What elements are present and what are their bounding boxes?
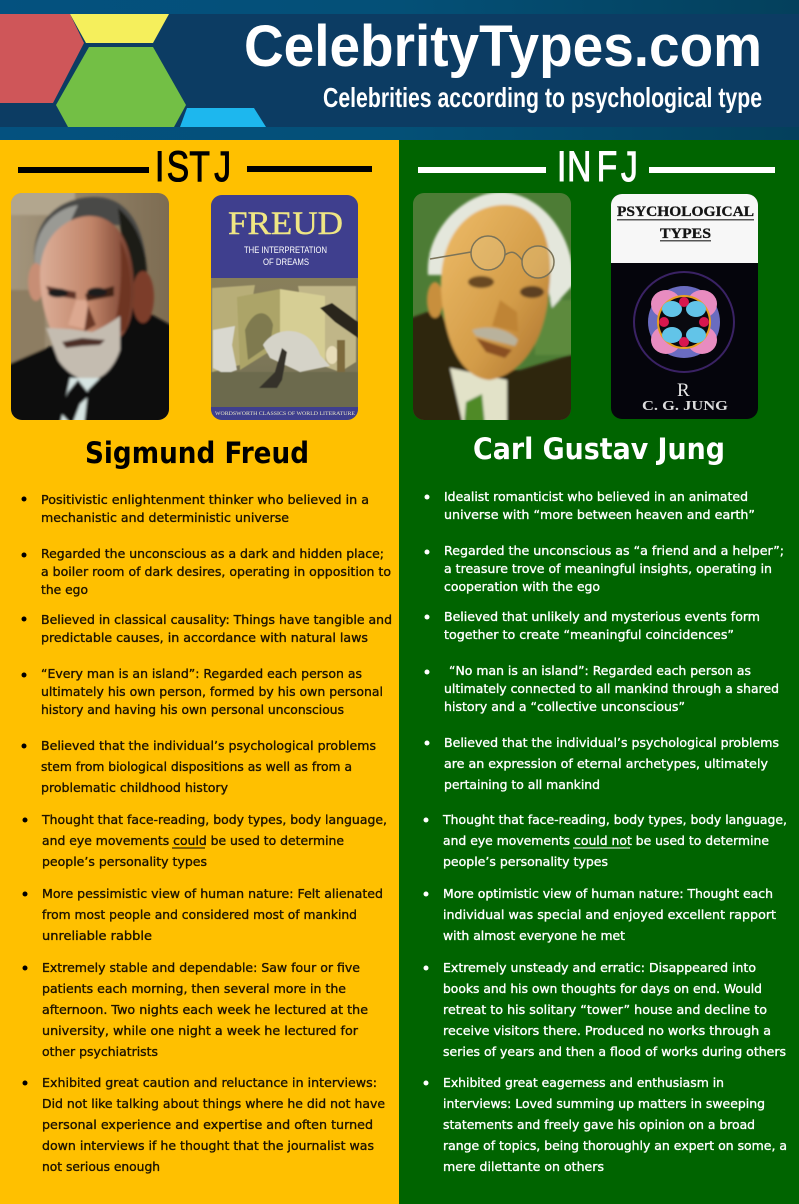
bullet: face-reading: Thought that face-reading, body types, body language,	[442, 812, 787, 827]
face	[441, 205, 550, 380]
mandala	[634, 272, 734, 372]
bullet: interviews: statements and freely gave his opinion on a broad	[443, 1117, 755, 1132]
bullet: coincidences: together to create “meaningful coincidences”	[444, 627, 734, 642]
bullet: idealist	[424, 489, 755, 522]
icon: yellow hexagon	[70, 14, 169, 43]
bullet: causality: predictable causes, in accordance with natural laws	[41, 630, 368, 645]
bullet: problems: pertaining to all mankind	[444, 777, 600, 792]
bullet: island: ultimately connected to all mankind through a shared	[444, 681, 779, 696]
bullet: unsteady: series of years and then a flood of works during others	[443, 1044, 786, 1059]
bullet: interviews: down interviews if he thought that the journalist was	[42, 1138, 374, 1153]
header banner	[0, 0, 799, 140]
bullet: stable: afternoon. Two nights each week he lectured at the	[42, 1002, 368, 1017]
bullet: unconscious: a treasure trove of meaningful insights, operating in	[444, 561, 772, 576]
bullet: interviews: not serious enough	[42, 1159, 160, 1174]
bullet: face-reading	[22, 812, 387, 869]
bullet: idealist: Idealist romanticist who believed in an animated	[444, 489, 748, 504]
heading: INFJ	[418, 143, 775, 191]
book subtitle: THE INTERPRETATION	[244, 245, 327, 255]
brow and eye shadow	[46, 286, 76, 299]
heading: ISTJ	[18, 143, 372, 191]
bullet: interviews: range of topics, being thoroughly an expert on some, a	[443, 1138, 787, 1153]
bullet: pessimistic: More pessimistic view of human nature: Felt alienated	[42, 886, 383, 901]
bullet: stable	[22, 960, 368, 1059]
ear	[132, 271, 154, 323]
bullet: island: “Every man is an island”: Regarded each person as	[41, 666, 362, 681]
bullet: unsteady: receive visitors there. Produced no works through a	[443, 1023, 771, 1038]
bullet: idealist: universe with “more between heaven and earth”	[444, 507, 755, 522]
jacket	[413, 310, 571, 420]
icon: blue hexagon	[180, 108, 266, 127]
bullet: face-reading: people’s personality types	[42, 854, 207, 869]
bullet: face-reading	[424, 812, 787, 869]
bullet: optimistic: More optimistic view of human nature: Thought each	[443, 886, 773, 901]
bullet: problems: are an expression of eternal archetypes, ultimately	[444, 756, 769, 771]
bullet: problems: problematic childhood history	[41, 780, 229, 795]
bullet: pessimistic: from most people and considered most of mankind	[42, 907, 357, 922]
book cover: Psychological Types	[611, 194, 758, 419]
bullet: island: history and having his own personal unconscious	[41, 702, 344, 717]
bullet: interviews: Exhibited great eagerness and enthusiasm in	[443, 1075, 724, 1090]
bullet: optimistic	[424, 886, 776, 943]
beard	[46, 316, 120, 380]
bullet: pessimistic: unreliable rabble	[42, 928, 152, 943]
cover painting	[211, 284, 358, 390]
book subtitle: OF DREAMS	[263, 257, 309, 267]
bullet: stable: university, while one night a week he lectured for	[42, 1023, 359, 1038]
bullet: problems: Believed that the individual’s psychological problems	[444, 735, 779, 750]
glasses	[430, 236, 554, 278]
name: Sigmund Freud: Sigmund Freud	[85, 436, 309, 470]
bullet: unconscious: Regarded the unconscious as a dark and hidden place;	[41, 546, 384, 561]
bullet: causality: Believed in classical causality: Things have tangible and	[41, 612, 392, 627]
bullet: problems	[22, 738, 376, 795]
bullet: island	[424, 663, 779, 714]
book author: C. G. JUNG	[642, 399, 728, 414]
portrait: Sigmund Freud	[11, 193, 169, 420]
heading: ISTJ: ISTJ	[155, 143, 231, 191]
tie	[464, 394, 485, 425]
bullet: face-reading: and eye movements could be used to determine	[42, 833, 344, 848]
book title: TYPES	[660, 226, 711, 242]
collar	[450, 368, 507, 425]
ear	[427, 282, 443, 318]
bullet: face-reading: and eye movements could not be used to determine	[443, 833, 769, 848]
panel: INFJ background	[399, 140, 799, 1204]
site title: CelebrityTypes.com	[244, 14, 762, 79]
book subtitle	[244, 246, 326, 265]
bullet: optimistic: individual was special and enjoyed excellent rapport	[443, 907, 776, 922]
bullet: face-reading: Thought that face-reading, body types, body language,	[41, 812, 387, 827]
bullet: stable: other psychiatrists	[42, 1044, 158, 1059]
bullet: interviews	[424, 1075, 787, 1174]
bullet: face-reading: people’s personality types	[443, 854, 608, 869]
bullet: interviews: interviews: Loved summing up matters in sweeping	[443, 1096, 765, 1111]
bullet: island: “No man is an island”: Regarded each person as	[449, 663, 751, 678]
bullet: unconscious: cooperation with the ego	[444, 579, 600, 594]
bullet: unconscious: a boiler room of dark desires, operating in opposition to	[41, 564, 391, 579]
bullet: interviews	[22, 1075, 385, 1174]
book cover: The Interpretation of Dreams	[211, 195, 358, 420]
bullet: unsteady: Extremely unsteady and erratic: Disappeared into	[443, 960, 756, 975]
text list: Jung traits	[424, 489, 787, 1174]
bullet: interviews: Exhibited great caution and reluctance in interviews:	[42, 1075, 377, 1090]
bullet: island	[22, 666, 383, 717]
bullet: problems	[424, 735, 779, 792]
bullet: unconscious	[424, 543, 784, 594]
bullet: problems: stem from biological dispositions as well as from a	[41, 759, 352, 774]
bullet: problems: Believed that the individual’s psychological problems	[41, 738, 376, 753]
bullet: island: ultimately his own person, formed by his own personal	[41, 684, 383, 699]
icon: red hexagon	[0, 14, 84, 103]
book series strip: WORDSWORTH CLASSICS OF WORLD LITERATURE	[215, 411, 356, 417]
collar	[60, 378, 100, 425]
bullet: unsteady: books and his own thoughts for days on end. Would	[443, 981, 762, 996]
book title: FREUD: FREUD	[228, 206, 343, 242]
book title	[617, 204, 754, 242]
bullet: coincidences: Believed that unlikely and mysterious events form	[444, 609, 760, 624]
bullet: pessimistic	[22, 886, 383, 943]
bullet: positivistic	[22, 492, 369, 525]
bullet: optimistic: with almost everyone he met	[443, 928, 625, 943]
bullet: interviews: Did not like talking about things where he did not have	[42, 1096, 385, 1111]
suit	[11, 308, 169, 420]
hair	[428, 192, 573, 308]
bullet: unconscious: Regarded the unconscious as “a friend and a helper”;	[444, 543, 784, 558]
bullet: interviews: mere dilettante on others	[443, 1159, 604, 1174]
publisher mark: R	[677, 380, 690, 401]
name: Carl Gustav Jung: Carl Gustav Jung	[473, 432, 725, 466]
panel: ISTJ background	[0, 140, 399, 1204]
icon: green hexagon	[56, 47, 186, 127]
book title: PSYCHOLOGICAL	[617, 204, 754, 220]
bullet: positivistic: mechanistic and deterministic universe	[41, 510, 289, 525]
bullet: stable: patients each morning, then several more in the	[42, 981, 346, 996]
bullet: causality	[22, 612, 392, 645]
bullet: stable: Extremely stable and dependable: Saw four or five	[42, 960, 360, 975]
heading: INFJ: INFJ	[557, 143, 638, 191]
tie	[60, 380, 90, 425]
bullet: coincidences	[424, 609, 760, 642]
bullet: unconscious	[22, 546, 391, 597]
bullet: island: history and a “collective unconscious”	[444, 699, 685, 714]
bullet: unsteady: retreat to his solitary “tower” house and decline to	[443, 1002, 767, 1017]
bullet: unconscious: the ego	[41, 582, 88, 597]
bullet: positivistic: Positivistic enlightenment thinker who believed in a	[41, 492, 369, 507]
hair	[33, 196, 146, 256]
face	[40, 216, 134, 348]
bullet: interviews: personal experience and expertise and often turned	[42, 1117, 373, 1132]
bullet: unsteady	[424, 960, 786, 1059]
portrait: Carl Gustav Jung	[413, 193, 571, 420]
text list: Freud traits	[22, 492, 392, 1174]
